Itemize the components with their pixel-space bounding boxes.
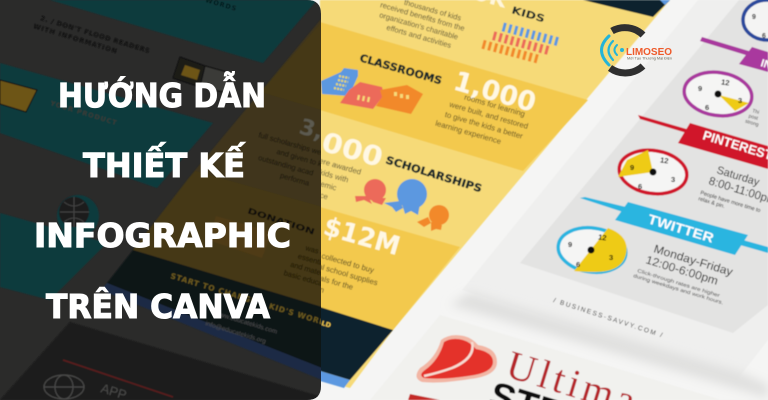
dimmed teal band middle [0, 63, 213, 188]
classrooms heading: CLASSROOMS [358, 52, 443, 87]
dim icon: yellow box [0, 80, 37, 112]
dimmed donation band [132, 208, 321, 308]
scholarships paragraph: cademic [307, 176, 338, 193]
classrooms number: 1,000 [450, 66, 539, 119]
logo tagline: Mới Tạo Thương Mại Điện [627, 56, 672, 60]
dimmed navy band [107, 250, 322, 368]
clock: pinterest red: 6 [638, 182, 642, 191]
twitter schedule: during weekdays and work hours. [632, 273, 724, 306]
dim orange box [208, 216, 272, 258]
dim red rule [63, 360, 173, 397]
dim donation paragraph: was co [303, 243, 329, 258]
classrooms paragraph: learning experience [434, 119, 502, 146]
kids paragraph: received benefits from the [379, 0, 466, 33]
clock note: post [748, 113, 759, 122]
logo wifi signal [602, 36, 623, 65]
clock: twitter blue: 6 [576, 260, 580, 269]
icon: blue rosette [384, 179, 427, 215]
scholarships heading: SCHOLARSHIPS [384, 154, 483, 195]
dim globe bottom [44, 375, 84, 399]
logo ring [610, 28, 643, 73]
pinterest schedule: relax & pin. [697, 196, 726, 210]
dim scholarship paragraph [248, 130, 329, 190]
icon: orange building windows [394, 94, 409, 97]
dim donation paragraph: and materi [289, 260, 326, 278]
icon: orange rosette [417, 205, 449, 231]
donation paragraph: erials for the [311, 271, 354, 292]
clock: pinterest red: 12 [660, 155, 669, 166]
dark overlay panel [0, 0, 336, 400]
clock: navy top: 6 [762, 33, 766, 40]
dimmed teal band lower [0, 213, 107, 300]
clock: purple: 12 [721, 77, 730, 88]
donation paragraph: ation [307, 282, 325, 295]
twitter schedule: 12:00-6:00pm [644, 254, 719, 288]
twitter schedule: Click-through rates are higher [636, 268, 721, 299]
scholarships paragraph: ere awarded [318, 156, 362, 177]
scholarships paragraph [304, 155, 362, 208]
dim footer links second line: info@educatekids.org [204, 320, 267, 345]
dimmed classrooms band [261, 22, 322, 110]
clock note: strong [744, 119, 760, 128]
clock: twitter blue: 9 [568, 240, 572, 249]
footer band [320, 307, 393, 380]
people pictogram [481, 19, 559, 67]
dim heading flood: 2. / DON'T FLOOD READERS [39, 14, 152, 56]
poster: yellow charity infographic [304, 0, 670, 388]
clock: purple: 6 [705, 103, 709, 112]
purple label bar [700, 37, 768, 72]
kids heading: KIDS [510, 5, 546, 25]
top blue stripe [660, 0, 670, 5]
kids paragraph [374, 0, 468, 52]
scholarships paragraph: mance [304, 186, 329, 202]
icon: orange building [376, 85, 423, 114]
title line 2: THIẾT KẾ [83, 141, 245, 185]
dim icon: globe [57, 195, 99, 237]
dim footer heading: START TO CHANGE A KID'S WORLD [169, 271, 333, 329]
icon: steak [416, 335, 497, 383]
dim footer links: www.educatekids.com [213, 310, 278, 336]
clock: navy top [743, 0, 768, 40]
dim heading product: YOUR PRODUCT [48, 99, 118, 127]
clock: pinterest red [616, 146, 690, 198]
paper sheet [554, 37, 707, 336]
logo: LIMOSEO [602, 28, 672, 73]
pinterest schedule: Saturday [715, 164, 761, 189]
dimmed yellow poster [160, 18, 321, 216]
donation paragraph: ial school supplies [315, 261, 379, 287]
icon: red building windows [358, 95, 369, 102]
logo wordmark: LIMOSEO [626, 46, 672, 58]
clock note [744, 108, 760, 128]
dim scholarship paragraph: outstanding acad [257, 153, 315, 177]
title line 3: INFOGRAPHIC [34, 216, 291, 255]
classrooms paragraph: to give the kids a better [444, 110, 524, 141]
band: donation [320, 207, 460, 330]
row: orange people [481, 40, 539, 63]
dim scholarship paragraph: full scholarships were [257, 130, 329, 159]
dim donation paragraph: essential [297, 252, 328, 268]
clock: twitter blue: 12 [598, 232, 607, 243]
icon: blue building windows [334, 76, 349, 90]
scholarships paragraph: n kids with [312, 166, 350, 185]
dim scholarships number: 3, [296, 115, 326, 145]
donation paragraph: collected to buy [320, 251, 375, 275]
title line 4: TRÊN CANVA [46, 286, 270, 326]
dimmed teal band top [50, 0, 317, 63]
icon: red building [340, 82, 384, 109]
donation amount: $12M [320, 212, 403, 262]
dim heading information: WITH INFORMATION [32, 22, 119, 56]
band: classrooms [320, 22, 588, 171]
scholarships number: 000 [318, 127, 386, 174]
title [34, 71, 291, 326]
pinterest schedule [697, 164, 768, 214]
classrooms paragraph [434, 87, 532, 152]
clock: twitter blue: 3 [609, 253, 613, 262]
shadow between sheets [450, 292, 768, 398]
row: red people [492, 31, 549, 55]
dim scholarship paragraph: performa [279, 171, 311, 188]
dimmed dark poster [0, 322, 322, 400]
poster: steak infographic [407, 334, 633, 400]
clock note: Thi [751, 108, 760, 116]
dim icon: book [173, 57, 230, 92]
kids paragraph: efforts and activities [385, 23, 453, 50]
panel base [0, 0, 321, 400]
website credit: / BUSINESS-SAVVY.COM / [552, 297, 664, 339]
classrooms paragraph: were built, and restored [447, 100, 529, 131]
clock: twitter blue [555, 223, 629, 277]
pinterest label [638, 115, 768, 169]
row: blue people [502, 23, 559, 46]
classrooms paragraph: rooms for learning [463, 93, 526, 119]
kids paragraph: organization's charitable [378, 10, 459, 42]
clock: purple: 3 [738, 96, 742, 105]
clock: purple [681, 68, 755, 120]
clock: purple: 9 [698, 84, 702, 93]
title line 1: HƯỚNG DẪN [58, 71, 266, 115]
twitter schedule: Monday-Friday [652, 243, 734, 279]
poster: social media timing infographic [520, 0, 768, 338]
clock: navy top: 9 [752, 14, 756, 21]
dimmed blue stripe [101, 283, 322, 380]
dim heading donation: DONATION [246, 206, 316, 237]
twitter label: TWITTER [646, 212, 716, 246]
footer text: LD [320, 319, 332, 330]
inner grey panel [520, 0, 768, 333]
steak paper [408, 351, 632, 400]
pinterest schedule: People have more time to [699, 190, 761, 214]
clock: pinterest red: 3 [671, 175, 675, 184]
dim donation paragraph: basic educati [283, 268, 328, 289]
dim donation paragraph [283, 239, 336, 289]
twitter label [580, 197, 768, 255]
icon: blue building [321, 68, 358, 96]
footer blue stripe [320, 371, 350, 388]
red label [408, 394, 440, 400]
donation paragraph [307, 250, 382, 309]
top navy band [583, 0, 670, 17]
clock: pinterest red: 9 [630, 163, 634, 172]
dim scholarship paragraph: and given to k [276, 147, 323, 169]
icon: red rosette [355, 179, 386, 205]
twitter schedule [632, 243, 734, 306]
